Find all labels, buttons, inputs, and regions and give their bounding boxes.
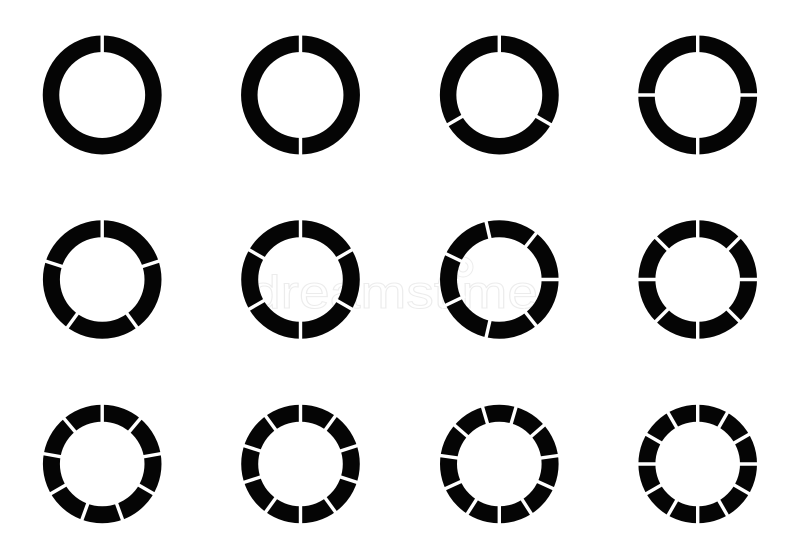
ring: 5 segments [41, 216, 163, 331]
ring: 3 segments [444, 31, 555, 146]
ring: 7 segments [442, 217, 563, 342]
ring: 4 segments [634, 31, 762, 159]
ring: 9 segments [39, 400, 165, 524]
ring: 12 segments [634, 400, 762, 528]
watermark [250, 257, 551, 318]
ring: 11 segments [436, 403, 563, 528]
watermark: dreamstime [250, 266, 538, 318]
ring: 1 segment [51, 31, 153, 146]
ring: 2 segments [249, 31, 352, 159]
ring: 10 segments [240, 400, 361, 528]
ring: 8 segments [634, 216, 762, 344]
ring: 6 segments [245, 216, 356, 344]
watermark: ® [543, 299, 551, 310]
